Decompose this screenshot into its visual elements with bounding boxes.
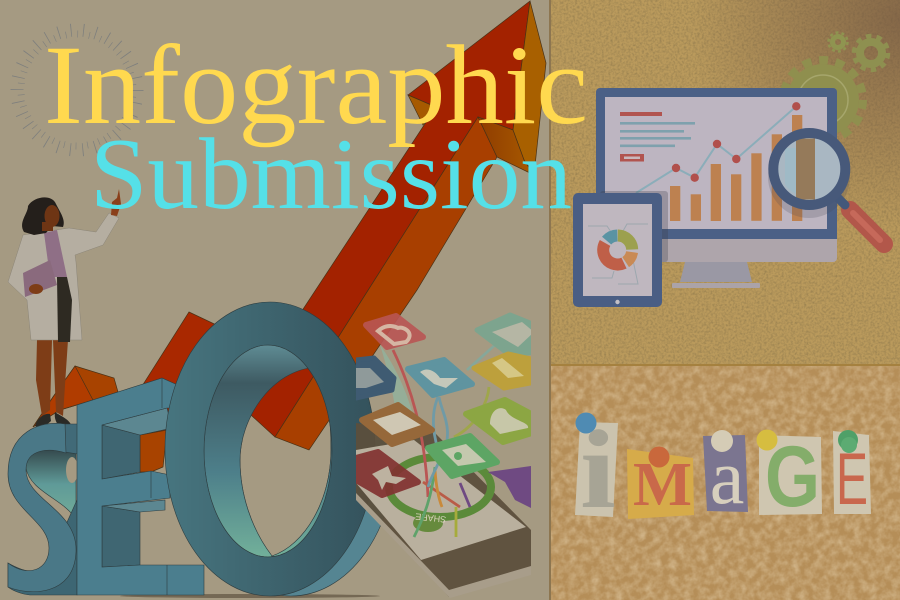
skirt — [57, 277, 72, 342]
share text: SHARE — [415, 511, 447, 525]
title: Submission: Submission — [90, 118, 572, 231]
hand on folder — [29, 284, 43, 294]
icon: heart — [366, 316, 423, 347]
bar chart — [670, 115, 802, 221]
icon: sunburst ticks — [17, 30, 137, 150]
handle highlight — [853, 213, 880, 240]
icon: envelope — [362, 405, 432, 444]
ground shadow — [120, 594, 380, 598]
magnified bar — [796, 138, 815, 200]
illustration: IMAGE cut-out letters — [575, 408, 871, 532]
push pins — [576, 412, 858, 468]
share ring — [389, 457, 491, 517]
letter O: front face — [165, 302, 375, 596]
letter E note — [833, 431, 871, 520]
monitor chin — [596, 238, 837, 262]
handle — [850, 210, 884, 244]
coat and raised arm — [8, 213, 119, 340]
illustration: phone with social icons — [356, 315, 535, 598]
text block: report lines — [620, 112, 695, 162]
icon: video — [428, 436, 497, 476]
illustration: tablet with donut chart — [573, 193, 662, 307]
letter S — [8, 423, 78, 595]
letter E — [77, 378, 204, 595]
donut chart — [597, 230, 638, 270]
monitor stand — [680, 262, 752, 282]
monitor frame — [596, 88, 837, 239]
callout lines — [588, 224, 648, 284]
icon: twitter bird — [408, 360, 472, 395]
letter M note: M — [633, 451, 692, 519]
shirt — [44, 230, 67, 277]
home button — [615, 300, 620, 304]
letter O: extruded depth — [240, 440, 381, 596]
face — [44, 205, 60, 227]
raised hand — [111, 189, 121, 216]
lens highlight — [380, 346, 412, 412]
letter a note: a — [710, 433, 744, 520]
magnifier shadow — [768, 136, 850, 218]
monitor screen — [605, 97, 827, 229]
icon: purple tag — [488, 466, 531, 508]
letter O: inner wall — [204, 345, 332, 557]
neck — [42, 222, 53, 231]
background: cork upper right panel — [549, 0, 900, 365]
phone screen — [356, 440, 526, 560]
letter G note: G — [765, 429, 820, 525]
see-through gap in S — [66, 457, 78, 483]
icon: gears — [783, 32, 888, 140]
phone body — [356, 423, 531, 597]
shoes — [35, 412, 72, 427]
tablet body — [573, 193, 662, 307]
connector stems — [393, 345, 495, 537]
title: Infographic: Infographic — [44, 23, 588, 148]
icon: person — [466, 400, 535, 442]
monitor base — [672, 283, 760, 288]
icon: comment — [477, 315, 535, 355]
phone edge — [356, 493, 531, 598]
tiny gear — [828, 32, 848, 52]
letter E note: E — [836, 439, 868, 520]
icon: plus — [356, 452, 418, 495]
icon: thumbs up — [356, 358, 394, 398]
icon: magnifying glass — [768, 133, 884, 244]
lens ring — [773, 133, 845, 205]
collar — [838, 198, 845, 205]
letter i note: i — [580, 408, 616, 532]
illustration: presenter woman — [8, 189, 121, 427]
illustration: SEO 3D letters — [8, 302, 396, 598]
line chart — [636, 102, 800, 193]
illustration: monitor with charts — [596, 88, 837, 288]
small gear — [854, 36, 888, 70]
hair — [22, 197, 64, 235]
big gear — [783, 60, 863, 140]
background: left panel — [0, 0, 550, 600]
illustration: red growth arrows — [33, 1, 546, 472]
background: cork lower right panel — [549, 0, 900, 600]
folder — [23, 260, 57, 297]
icon: bookmark — [474, 354, 535, 388]
legs — [36, 340, 68, 416]
share badge — [413, 514, 443, 532]
tablet screen — [583, 204, 652, 296]
lens — [777, 137, 841, 201]
tablet shadow — [600, 191, 668, 262]
